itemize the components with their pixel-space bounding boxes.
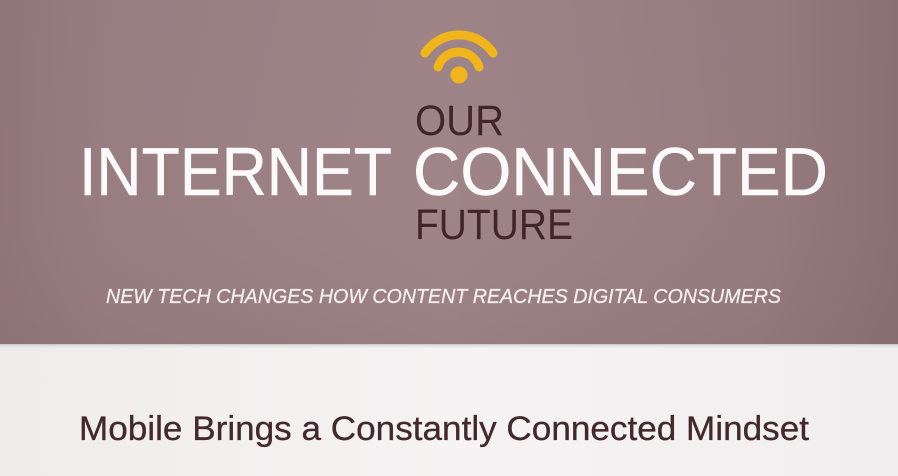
title word: CONNECTED: CONNECTED	[413, 134, 828, 210]
subtitle: NEW TECH CHANGES HOW CONTENT REACHES DIGITAL CONSUMERS	[106, 286, 782, 308]
panel: lower white section	[0, 343, 898, 476]
icon: wifi signal	[425, 35, 493, 84]
section heading: Mobile Brings a Constantly Connected Mindset	[79, 410, 810, 448]
title word: FUTURE: FUTURE	[415, 201, 573, 249]
title word: INTERNET: INTERNET	[79, 134, 392, 210]
panel: mauve header band	[0, 0, 898, 344]
title word: OUR: OUR	[415, 97, 504, 145]
